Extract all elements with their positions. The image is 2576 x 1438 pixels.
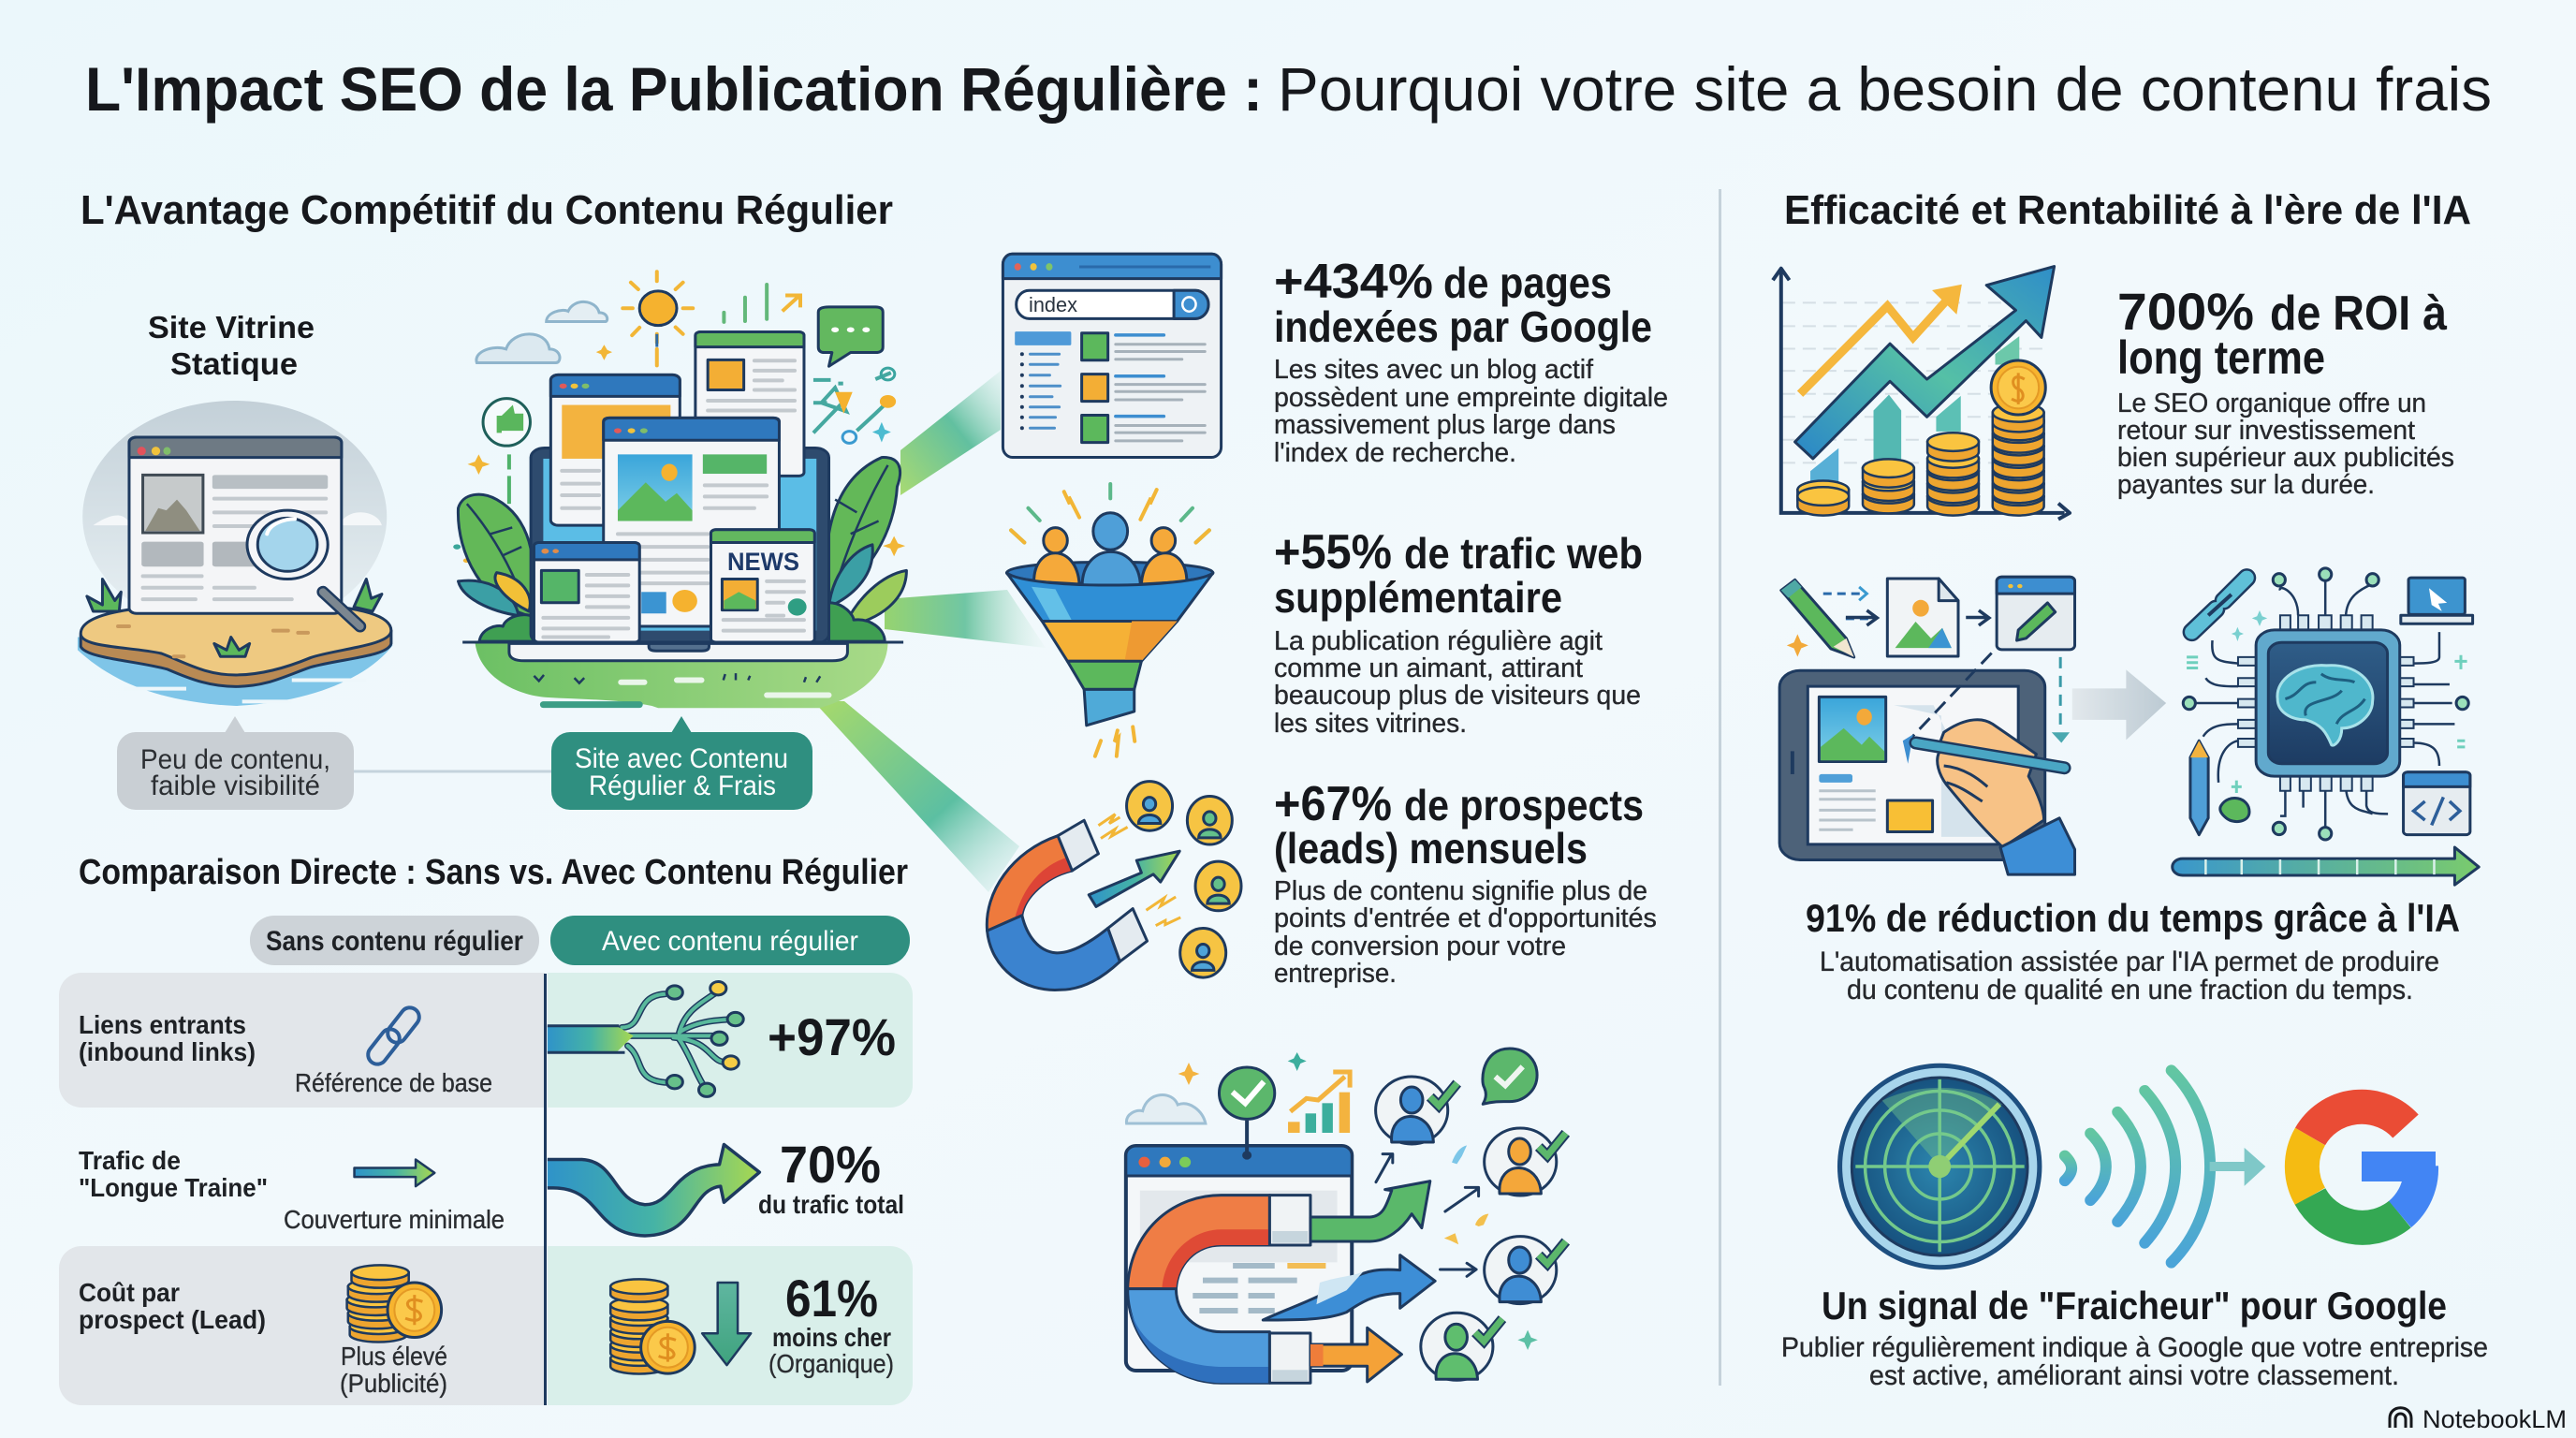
horseshoe magnet bbox=[1128, 1196, 1325, 1383]
callout: peu de contenu: faible visibilité bbox=[151, 770, 320, 801]
heading: avantage compétitif: L'Avantage Compétitif du Contenu Régulier bbox=[80, 187, 893, 233]
row: coût par prospect: (Organique) bbox=[768, 1349, 894, 1378]
stat heading: +67% bbox=[1274, 777, 1392, 831]
stat heading: de pages bbox=[1443, 258, 1612, 307]
roi description: retour sur investissement bbox=[2117, 416, 2415, 446]
beam arrow to indexed pages bbox=[900, 371, 1001, 495]
title bbox=[85, 54, 2492, 124]
heading: efficacité et rentabilité: Efficacité et Rentabilité à l'ère de l'IA bbox=[1784, 187, 2471, 233]
beam arrow to prospects bbox=[813, 701, 1019, 892]
stat description bbox=[1274, 355, 1668, 468]
heading: comparaison directe: Comparaison Directe : Sans vs. Avec Contenu Régulier bbox=[79, 853, 908, 892]
signal description: Publier régulièrement indique à Google que votre entreprise bbox=[1781, 1332, 2488, 1363]
laptop bbox=[462, 448, 903, 661]
roi description: payantes sur la durée. bbox=[2117, 470, 2375, 500]
column header: avec: Avec contenu régulier bbox=[602, 926, 858, 957]
title: L'Impact SEO de la Publication Régulière : bbox=[85, 54, 1263, 124]
stat description: possèdent une empreinte digitale bbox=[1274, 383, 1668, 413]
table vertical divider bbox=[544, 974, 547, 1405]
stat description: l'index de recherche. bbox=[1274, 438, 1516, 468]
row: liens entrants: +97% bbox=[768, 1007, 896, 1066]
icon: static website on island bbox=[78, 401, 392, 706]
output arrows bbox=[1263, 1145, 1488, 1382]
icon: search index browser bbox=[1003, 254, 1222, 457]
panel: site vitrine statique bbox=[78, 310, 392, 810]
icon: long tail arrow bbox=[548, 1144, 759, 1236]
decoration: clouds and sun bbox=[453, 271, 905, 563]
title: Pourquoi votre site a besoin de contenu frais bbox=[1278, 54, 2492, 124]
text: index: index bbox=[1029, 293, 1077, 316]
row: liens entrants: (inbound links) bbox=[79, 1037, 256, 1066]
callout: site avec contenu: Site avec Contenu bbox=[575, 743, 788, 774]
row: longue traine bbox=[79, 1135, 904, 1236]
callout: peu de contenu bbox=[117, 716, 354, 810]
row: longue traine: "Longue Traine" bbox=[79, 1173, 268, 1202]
stat description: de conversion pour votre bbox=[1274, 932, 1566, 961]
icon: small arrow bbox=[355, 1160, 434, 1186]
stat description bbox=[1274, 626, 1641, 739]
panel: réduction du temps ia bbox=[1779, 568, 2479, 1005]
stat description: points d'entrée et d'opportunités bbox=[1274, 903, 1657, 933]
row: coût par prospect: 61% bbox=[785, 1269, 878, 1328]
signal description: est active, améliorant ainsi votre classement. bbox=[1869, 1360, 2399, 1391]
callout: site avec contenu bbox=[551, 716, 812, 810]
stat description bbox=[1274, 876, 1657, 989]
icon: funnel bbox=[1007, 484, 1213, 756]
browser window bbox=[1126, 1146, 1352, 1371]
time reduction description bbox=[1820, 946, 2439, 1005]
watermark: notebooklm: NotebookLM bbox=[2422, 1405, 2567, 1433]
text: NEWS label: NEWS bbox=[727, 548, 799, 576]
stat heading bbox=[1274, 525, 1643, 622]
time reduction description: L'automatisation assistée par l'IA permet de produire bbox=[1820, 946, 2439, 977]
stat heading bbox=[1274, 777, 1644, 873]
check badge and chart bbox=[1126, 1052, 1350, 1160]
stat: prospects bbox=[987, 777, 1657, 990]
stat description: massivement plus large dans bbox=[1274, 410, 1616, 440]
row: longue traine: 70% bbox=[780, 1135, 881, 1194]
arrow: transition to ai bbox=[2072, 669, 2166, 740]
stat description: les sites vitrines. bbox=[1274, 709, 1467, 739]
converted lead avatars bbox=[1376, 1049, 1566, 1380]
stat description: Plus de contenu signifie plus de bbox=[1274, 876, 1647, 906]
stat description: entreprise. bbox=[1274, 959, 1397, 989]
stat heading: (leads) mensuels bbox=[1274, 824, 1588, 873]
stat heading: de prospects bbox=[1404, 781, 1644, 829]
site vitrine heading: Site Vitrine bbox=[148, 310, 315, 345]
stat: trafic web bbox=[1007, 484, 1643, 756]
stat heading: supplémentaire bbox=[1274, 573, 1562, 622]
chart: growth arrow and coin stacks bbox=[1773, 267, 2070, 520]
row: coût par prospect: (Publicité) bbox=[340, 1369, 447, 1398]
icon: signal waves and arrow bbox=[2065, 1070, 2265, 1263]
icon: magnet attracting leads bbox=[987, 782, 1241, 990]
row: liens entrants: Référence de base bbox=[295, 1068, 492, 1097]
time reduction description: du contenu de qualité en une fraction du temps. bbox=[1847, 975, 2413, 1005]
roi description: Le SEO organique offre un bbox=[2117, 389, 2426, 418]
roi description: bien supérieur aux publicités bbox=[2117, 443, 2454, 473]
roi heading: long terme bbox=[2117, 331, 2325, 384]
stat description: comme un aimant, attirant bbox=[1274, 653, 1583, 683]
signal heading: Un signal de "Fraicheur" pour Google bbox=[1822, 1284, 2447, 1328]
icon: chain link bbox=[364, 1004, 423, 1068]
icon: link network branches bbox=[548, 982, 743, 1096]
row: longue traine: du trafic total bbox=[758, 1190, 904, 1219]
row: longue traine: Couverture minimale bbox=[284, 1205, 505, 1234]
beam arrow to web traffic bbox=[885, 590, 1046, 648]
icon: down arrow bbox=[702, 1283, 751, 1365]
row: coût par prospect: Coût par bbox=[79, 1278, 180, 1307]
row: coût par prospect bbox=[59, 1246, 913, 1405]
illustration: ai chip with brain bbox=[2173, 568, 2479, 885]
row: coût par prospect: prospect (Lead) bbox=[79, 1305, 266, 1334]
signal description bbox=[1781, 1332, 2488, 1391]
roi description bbox=[2117, 389, 2454, 500]
panel: roi bbox=[1773, 267, 2454, 520]
row: longue traine: Trafic de bbox=[79, 1146, 181, 1175]
roi heading bbox=[2117, 282, 2448, 384]
decoration: leaves bbox=[458, 458, 906, 641]
icon: coin stack lower cost bbox=[610, 1279, 751, 1373]
connector between callouts bbox=[354, 770, 551, 773]
stat description: beaucoup plus de visiteurs que bbox=[1274, 681, 1641, 711]
site vitrine heading bbox=[148, 310, 315, 381]
time reduction heading: 91% de réduction du temps grâce à l'IA bbox=[1806, 896, 2460, 940]
stat description: La publication régulière agit bbox=[1274, 626, 1603, 656]
icon: radar bbox=[1837, 1064, 2042, 1269]
column header: sans bbox=[250, 916, 539, 965]
icon: google logo bbox=[2302, 1107, 2436, 1227]
panel: site avec contenu régulier bbox=[453, 271, 906, 810]
row: coût par prospect: Plus élevé bbox=[341, 1342, 447, 1371]
column divider bbox=[1719, 189, 1721, 1386]
stat description: Les sites avec un blog actif bbox=[1274, 355, 1594, 385]
icon: coin stack higher cost bbox=[347, 1265, 442, 1343]
stat heading: +55% bbox=[1274, 525, 1392, 580]
column header: sans: Sans contenu régulier bbox=[266, 926, 523, 957]
windows: stacked web pages bbox=[534, 331, 814, 642]
site vitrine heading: Statique bbox=[170, 346, 298, 381]
illustration: manual workflow on tablet bbox=[1779, 577, 2075, 874]
stat: pages indexées bbox=[1003, 254, 1668, 468]
row: coût par prospect: moins cher bbox=[772, 1323, 891, 1352]
row: liens entrants bbox=[59, 973, 913, 1108]
stat heading: +434% bbox=[1274, 255, 1433, 309]
stat heading bbox=[1274, 255, 1652, 351]
callout: peu de contenu: Peu de contenu, bbox=[140, 744, 330, 775]
panel: comparison table bbox=[59, 916, 913, 1405]
callout: site avec contenu: Régulier & Frais bbox=[589, 770, 776, 801]
illustration: fresh content website bbox=[453, 271, 906, 708]
stat heading: indexées par Google bbox=[1274, 302, 1652, 351]
panel: signal de fraîcheur bbox=[1781, 1064, 2488, 1391]
roi heading: de ROI à bbox=[2270, 286, 2448, 341]
stat heading: de trafic web bbox=[1404, 529, 1643, 578]
row: liens entrants: Liens entrants bbox=[79, 1010, 246, 1039]
roi heading: 700% bbox=[2117, 282, 2254, 341]
illustration: lead magnet page bbox=[1126, 1049, 1566, 1383]
column header: avec bbox=[550, 916, 910, 965]
